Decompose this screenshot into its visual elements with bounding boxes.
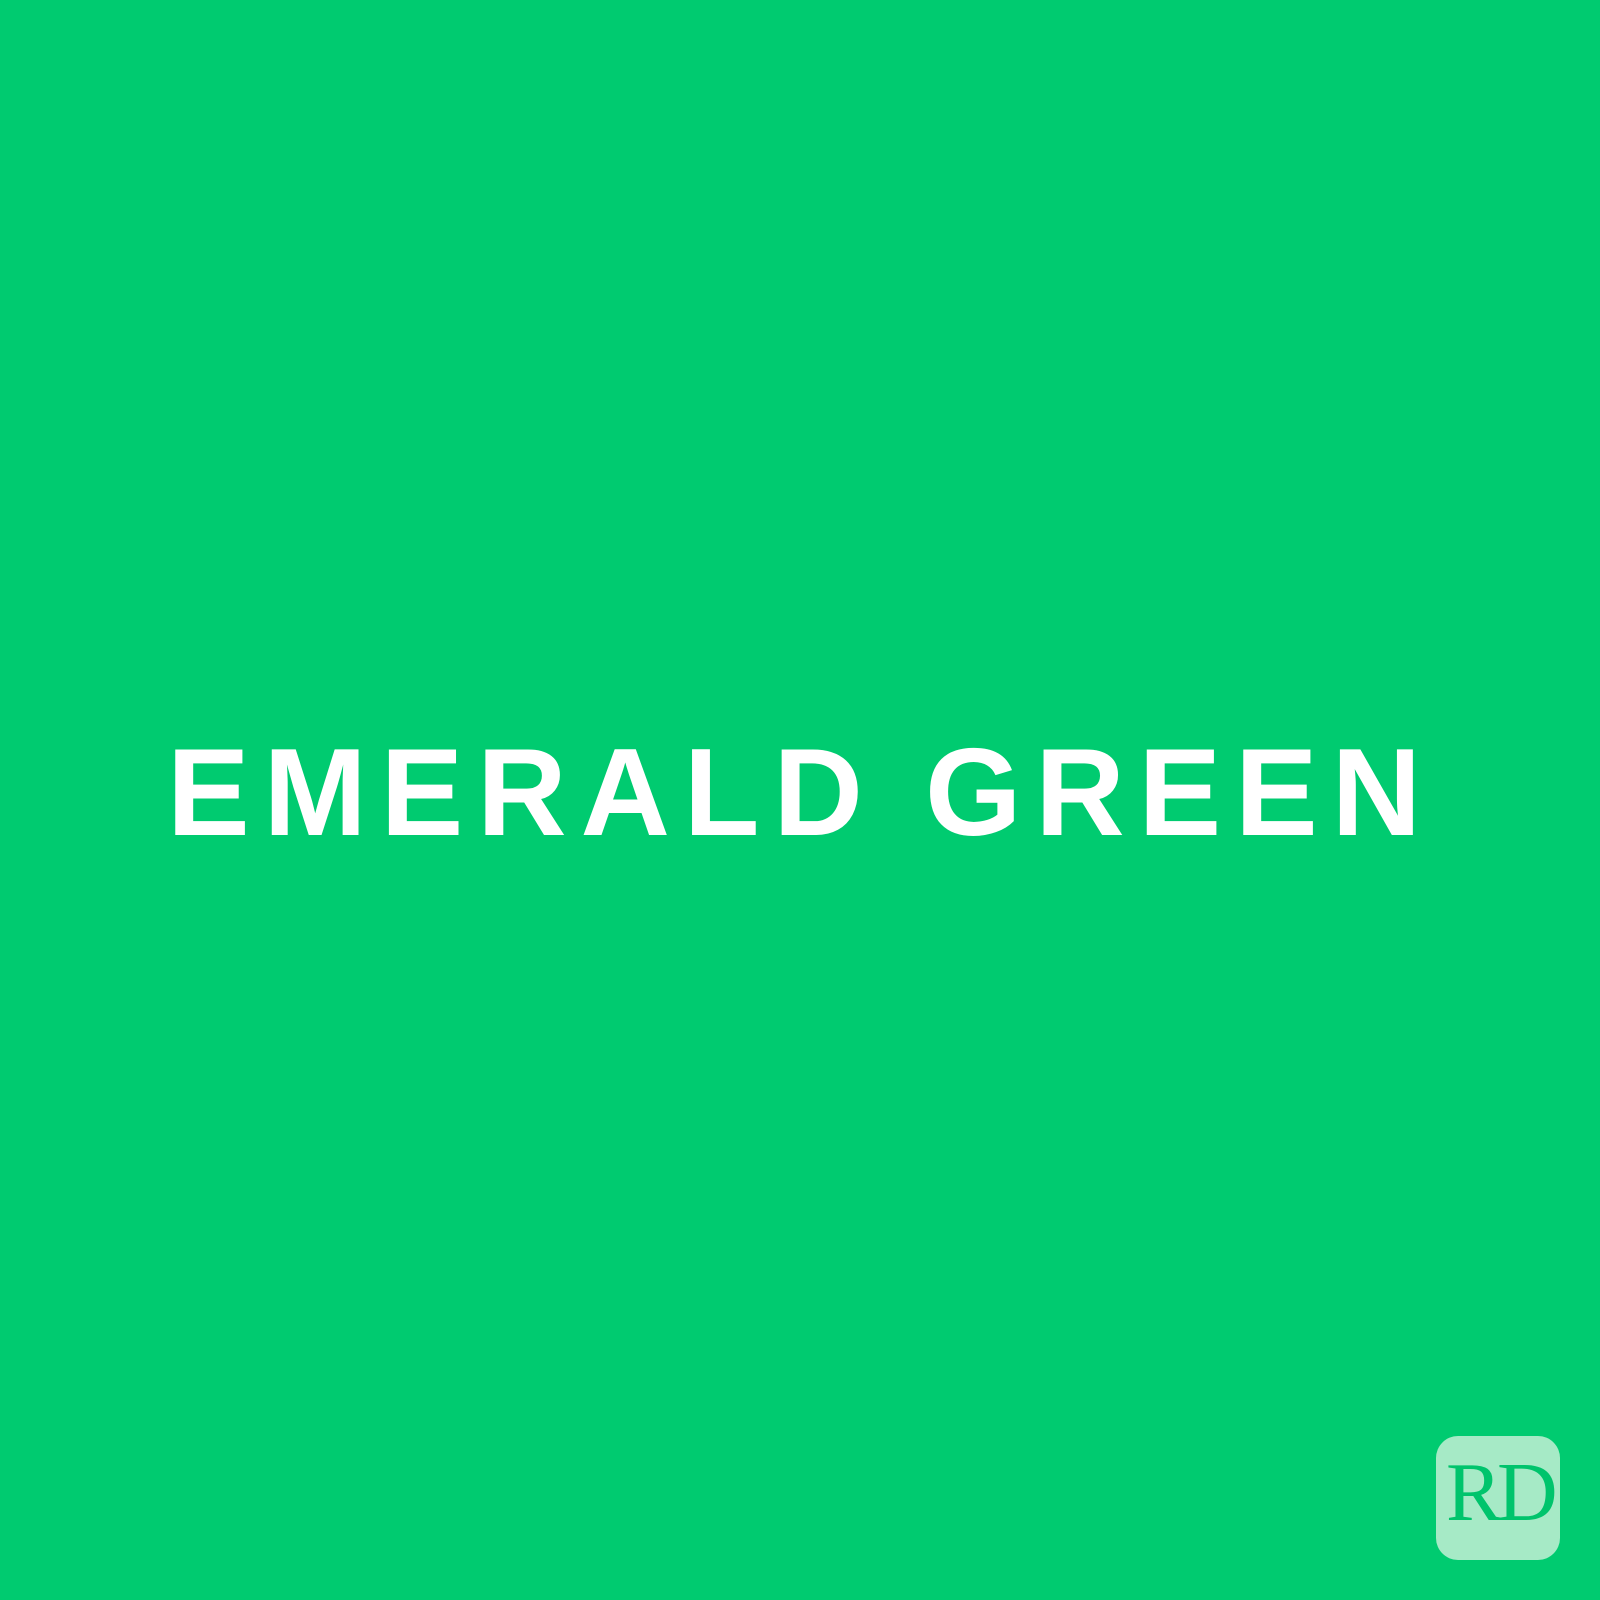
icon: RD logo [1436, 1436, 1560, 1560]
icon: RD logo: RD [1446, 1446, 1553, 1539]
title: EMERALD GREEN [167, 724, 1435, 862]
